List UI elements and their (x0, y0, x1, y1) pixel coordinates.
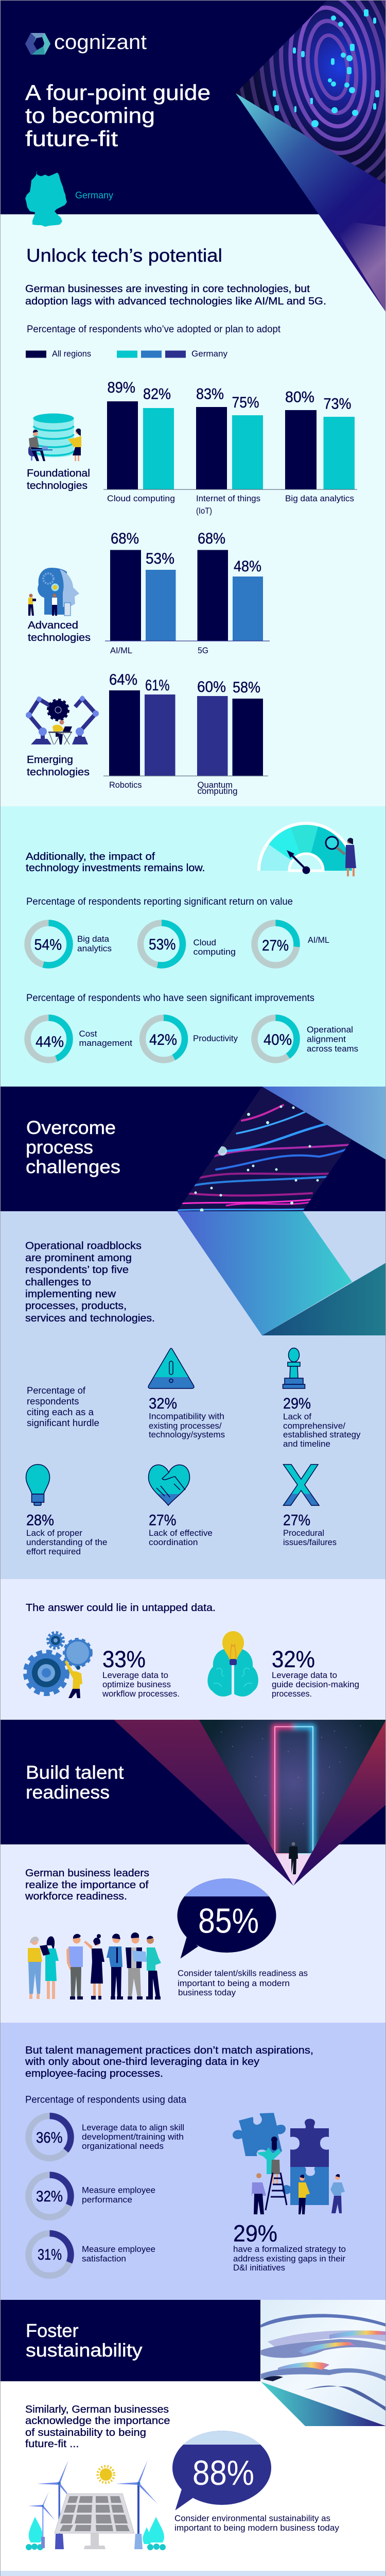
stat: incompatibility 32%: technology/systems (149, 1430, 225, 1439)
panel: foster sustainability header (0, 2300, 386, 2427)
icon: cognizant logo mark (25, 33, 50, 55)
image: glowing data spiral (236, 1, 385, 184)
section title: Foster (26, 2320, 79, 2341)
stat: coordination 27% (148, 1465, 213, 1547)
section title: process (26, 1137, 93, 1158)
icon: map of Germany (25, 171, 67, 227)
section title (26, 1117, 120, 1177)
text: sustainability importance: of sustainability to being (25, 2427, 146, 2438)
donut: big data analytics 54% (28, 923, 112, 965)
image: light streams (175, 1084, 355, 1213)
donut: operational alignment 40% (254, 1018, 358, 1060)
donut: productivity 42%: 42% (149, 1031, 177, 1048)
panel: build talent readiness header (0, 1718, 386, 1888)
text: environmental stat (174, 2514, 340, 2533)
section title: sustainability (26, 2340, 142, 2361)
donut: AI/ML 27% (254, 923, 329, 965)
donut: AI/ML 27%: 27% (262, 937, 289, 954)
donut: big data analytics 54%: Big data (77, 934, 110, 944)
section title: readiness (26, 1782, 110, 1803)
panel: process challenges (0, 1211, 386, 1579)
panel: cover header (0, 0, 386, 806)
stat: effort 28%: understanding of the (26, 1537, 107, 1547)
section title: challenges (26, 1156, 120, 1177)
stat: no strategy 29%: comprehensive/ (283, 1421, 345, 1431)
stat: 33% workflow (102, 1646, 180, 1699)
donut: align skill development 36%: 36% (36, 2129, 63, 2146)
bar chart: advanced technologies: 68% (111, 530, 139, 547)
text: talent readiness stat: Consider talent/skills readiness as (178, 1969, 308, 1978)
donut: employee satisfaction 31% (29, 2233, 155, 2276)
donut: cloud computing 53%: computing (194, 947, 236, 957)
bar chart: foundational technologies: 73% (323, 396, 351, 412)
chart subtitle: Percentage of respondents using data (25, 2095, 186, 2105)
section title: Build talent (26, 1762, 124, 1783)
bar chart: advanced technologies (105, 530, 270, 655)
text: environmental stat: important to being modern business today (174, 2523, 340, 2533)
intro text: German businesses are investing in core technologies, but (25, 283, 310, 295)
label: advanced technologies: technologies (28, 632, 91, 643)
bar chart: emerging technologies: 60% (197, 679, 226, 696)
body text: services and technologies. (25, 1313, 155, 1324)
bar chart: emerging technologies: computing (198, 786, 238, 796)
shape: gradient parallelogram (177, 1211, 352, 1335)
text: sustainability importance (25, 2404, 170, 2450)
intro text: adoption lags with advanced technologies like AI/ML and 5G. (25, 296, 326, 307)
icon: chess pawn (283, 1348, 305, 1388)
stat: procedural 27%: issues/failures (283, 1537, 337, 1547)
text: business leaders: realize the importance of (25, 1879, 149, 1891)
icon: speedometer gauge with person (259, 823, 356, 876)
chart subtitle: Percentage of (27, 1385, 86, 1396)
bar chart: foundational technologies: Cloud computing (107, 494, 175, 503)
stat: procedural 27% (283, 1464, 337, 1547)
label: advanced technologies: Advanced (28, 620, 78, 631)
icon: gears with person (26, 1633, 91, 1698)
label: advanced technologies (28, 620, 91, 643)
shape: teal purple triangle (261, 2382, 386, 2426)
stat: coordination 27%: Lack of effective (149, 1528, 213, 1538)
icon: robot arms with gear and engineer (26, 696, 99, 744)
bar chart: emerging technologies: 64% (109, 671, 137, 688)
callout: 88% speech bubble (170, 2428, 273, 2510)
body text (25, 1241, 155, 1324)
bar chart: emerging technologies: Robotics (109, 780, 142, 790)
stat: 33% workflow: Leverage data to (102, 1670, 168, 1680)
shape: blue corner triangle (262, 1087, 386, 1160)
panel: return on value (0, 806, 386, 1087)
donut: cost management 44%: 44% (36, 1033, 64, 1050)
stat: incompatibility 32%: 32% (149, 1395, 177, 1412)
stat: 29% D&I strategy: 29% (233, 2221, 277, 2247)
bar chart: foundational technologies (103, 379, 357, 516)
stat: effort 28%: 28% (26, 1512, 54, 1529)
icon: handshake heart (148, 1465, 189, 1505)
stat: 33% workflow: 33% (102, 1646, 146, 1672)
body text: Operational roadblocks (25, 1241, 142, 1252)
chart subtitle: Percentage of respondents who’ve adopted or plan to adopt (27, 324, 281, 335)
shape: gradient wedge (236, 93, 386, 312)
country label: Germany (75, 190, 113, 200)
stat: no strategy 29%: Lack of (283, 1412, 311, 1421)
body text: are prominent among (25, 1252, 132, 1264)
stat: coordination 27%: 27% (149, 1512, 176, 1529)
panel: talent management data (0, 2023, 386, 2300)
donut: cost management 44%: Cost (79, 1029, 97, 1039)
icon: warning triangle (148, 1348, 194, 1388)
donut: operational alignment 40%: 40% (264, 1031, 292, 1048)
callout: 85% speech bubble: 85% (198, 1901, 259, 1940)
text: business leaders (25, 1868, 149, 1902)
text: sustainability importance: Similarly, German businesses (25, 2404, 169, 2415)
heading: The answer could lie in untapped data. (26, 1602, 216, 1614)
donut: AI/ML 27%: AI/ML (308, 935, 329, 945)
stat: procedural 27%: Procedural (283, 1528, 324, 1538)
donut: employee performance 32%: 32% (36, 2188, 63, 2205)
stat: procedural 27%: 27% (283, 1512, 310, 1529)
bar chart: foundational technologies: 75% (232, 394, 259, 411)
stat: no strategy 29%: 29% (283, 1395, 311, 1412)
label: foundational technologies: Foundational (27, 468, 90, 479)
donut: employee performance 32%: Measure employee (82, 2185, 155, 2195)
bar chart: emerging technologies: 61% (145, 677, 170, 694)
stat: incompatibility 32% (148, 1348, 225, 1439)
stat: 32% decision-making: guide decision-making (272, 1680, 359, 1689)
chart subtitle: citing each as a (27, 1407, 94, 1417)
chart subtitle: Percentage of respondents who have seen significant improvements (26, 993, 314, 1004)
stat: effort 28%: effort required (26, 1547, 81, 1556)
bar chart: foundational technologies: 80% (285, 388, 314, 406)
text: business leaders: German business leaders (25, 1868, 149, 1879)
bar chart: advanced technologies: 68% (198, 530, 225, 547)
shape: right wedge (293, 1720, 386, 1886)
legend: Germany (191, 349, 227, 359)
stat: effort 28% (26, 1464, 107, 1556)
illustration: puzzle pieces and people (233, 2113, 345, 2214)
text: talent readiness stat (178, 1969, 308, 1997)
heading: But talent management practices don’t match aspirations, (25, 2045, 313, 2056)
bar chart: foundational technologies: Big data analytics (285, 494, 354, 503)
donut: cloud computing 53%: 53% (149, 936, 176, 953)
bar chart: foundational technologies: Internet of things (196, 494, 260, 503)
donut: align skill development 36%: Leverage data to align skill (82, 2123, 184, 2132)
label: emerging technologies (27, 754, 90, 778)
panel: overcome process challenges header (0, 1084, 386, 1213)
body text: processes, products, (25, 1300, 127, 1312)
stat: no strategy 29%: and timeline (283, 1439, 330, 1449)
donut: big data analytics 54%: 54% (34, 937, 62, 954)
heading: unlock tech's potential: Unlock tech’s potential (26, 245, 222, 266)
bar chart: emerging technologies (103, 671, 268, 796)
stat: 32% decision-making: 32% (272, 1646, 315, 1672)
donut: operational alignment 40%: across teams (307, 1044, 358, 1054)
bar chart: advanced technologies: 48% (234, 558, 261, 575)
donut: cloud computing 53%: Cloud (194, 938, 216, 947)
icon: database with two people (28, 413, 81, 461)
legend (26, 349, 227, 359)
donut: employee satisfaction 31%: 31% (38, 2246, 62, 2263)
shape: purple left wedge (114, 1720, 293, 1886)
stat: incompatibility 32%: Incompatibility with (149, 1412, 224, 1421)
title: to becoming (25, 103, 155, 128)
illustration: wind turbines and solar panel (26, 2460, 166, 2550)
label: foundational technologies: technologies (27, 480, 87, 492)
stat: 33% workflow: workflow processes. (102, 1689, 180, 1699)
donut: align skill development 36%: organizational needs (82, 2141, 164, 2151)
title (25, 80, 210, 150)
heading: with only about one-third leveraging data in key (25, 2056, 259, 2067)
donut: operational alignment 40%: Operational (307, 1025, 353, 1035)
donut: employee satisfaction 31%: satisfaction (82, 2253, 126, 2264)
stat: 32% decision-making (272, 1646, 359, 1699)
stat: 29% D&I strategy: D&I initiatives (233, 2263, 285, 2273)
donut: employee performance 32%: performance (82, 2195, 132, 2205)
icon: brain with light bulb (207, 1631, 258, 1697)
image: iridescent glass waves (260, 2300, 386, 2427)
stat: 29% D&I strategy: have a formalized strategy to (233, 2244, 346, 2254)
donut: align skill development 36% (29, 2116, 184, 2158)
section title (26, 1762, 124, 1803)
text: talent readiness stat: business today (178, 1988, 236, 1997)
bar chart: emerging technologies: 58% (233, 679, 260, 696)
icon: X mark (283, 1464, 319, 1505)
label: foundational technologies (27, 468, 90, 492)
shape: purple wedge fade (329, 219, 386, 312)
stat: no strategy 29%: established strategy (283, 1430, 361, 1439)
stat: 29% D&I strategy (233, 2221, 346, 2273)
donut: big data analytics 54%: analytics (77, 944, 112, 953)
legend: All regions (52, 349, 91, 359)
panel: sustainability actions (0, 2571, 386, 2576)
chart subtitle (27, 1385, 99, 1428)
sub-heading: Additionally, the impact of (26, 851, 155, 862)
icon: AI head with people (28, 568, 79, 616)
sub-heading: technology investments remains low. (26, 862, 205, 874)
panel: light background of tech section (0, 214, 386, 806)
label: emerging technologies: technologies (27, 767, 90, 778)
stat: incompatibility 32%: existing processes/ (149, 1421, 222, 1431)
donut: cloud computing 53% (141, 923, 236, 965)
section title (26, 2320, 142, 2361)
stat: effort 28%: Lack of proper (26, 1528, 82, 1538)
bar chart: foundational technologies: (IoT) (196, 506, 212, 516)
donut: employee satisfaction 31%: Measure employee (82, 2244, 155, 2254)
heading: employee-facing processes. (25, 2068, 163, 2079)
intro text (25, 283, 326, 307)
image: neon doorway and person (196, 1718, 386, 1888)
donut: productivity 42%: Productivity (193, 1033, 238, 1043)
bar chart: emerging technologies: Quantum (198, 780, 233, 790)
donut: productivity 42% (143, 1018, 238, 1060)
label: emerging technologies: Emerging (27, 754, 73, 766)
text: sustainability importance: future-fit ... (25, 2438, 79, 2450)
shape: dark teal triangle (262, 1263, 386, 1335)
illustration: group of seven people (28, 1933, 161, 1999)
panel: workforce readiness (0, 1844, 386, 2023)
text: business leaders: workforce readiness. (25, 1891, 127, 1902)
bar chart: foundational technologies: 89% (107, 379, 135, 396)
chart subtitle: Percentage of respondents reporting significant return on value (26, 896, 293, 907)
body text: implementing new (25, 1289, 116, 1300)
text: talent readiness stat: important to being a modern (178, 1978, 290, 1988)
text: sustainability importance: acknowledge the importance (25, 2415, 170, 2427)
bar chart: advanced technologies: 5G (198, 646, 208, 655)
chart subtitle: respondents (27, 1396, 79, 1406)
stat: 29% D&I strategy: address existing gaps in their (233, 2253, 345, 2264)
stat: coordination 27%: coordination (149, 1537, 198, 1547)
bar chart: advanced technologies: AI/ML (110, 646, 132, 655)
text: environmental stat: Consider environmental sustainability as (174, 2514, 330, 2523)
bar chart: foundational technologies: 82% (143, 385, 171, 403)
icon: light bulb (26, 1464, 49, 1505)
donut: cost management 44%: management (79, 1038, 132, 1048)
sub-heading (26, 851, 205, 874)
bar chart: advanced technologies: 53% (146, 550, 174, 567)
stat: 32% decision-making: Leverage data to (272, 1670, 337, 1680)
title: A four-point guide (25, 80, 210, 105)
donut: employee performance 32% (29, 2175, 155, 2217)
callout: 88% speech bubble: 88% (192, 2453, 254, 2493)
donut: align skill development 36%: development/training with (82, 2132, 184, 2142)
bar chart: foundational technologies: 83% (196, 385, 224, 403)
logo wordmark: cognizant (54, 31, 147, 54)
title: future-fit (25, 127, 118, 150)
stat: 33% workflow: optimize business (102, 1680, 171, 1689)
callout: 85% speech bubble (175, 1875, 278, 1959)
stat: 32% decision-making: processes. (272, 1689, 312, 1699)
donut: operational alignment 40%: alignment (307, 1035, 346, 1044)
stat: no strategy 29% (283, 1348, 361, 1449)
body text: challenges to (25, 1277, 91, 1288)
chart subtitle: significant hurdle (27, 1418, 99, 1428)
section title: Overcome (26, 1117, 116, 1138)
body text: respondents’ top five (25, 1264, 129, 1276)
heading (25, 2045, 313, 2079)
donut: cost management 44% (28, 1018, 132, 1060)
panel: untapped data (0, 1579, 386, 1720)
